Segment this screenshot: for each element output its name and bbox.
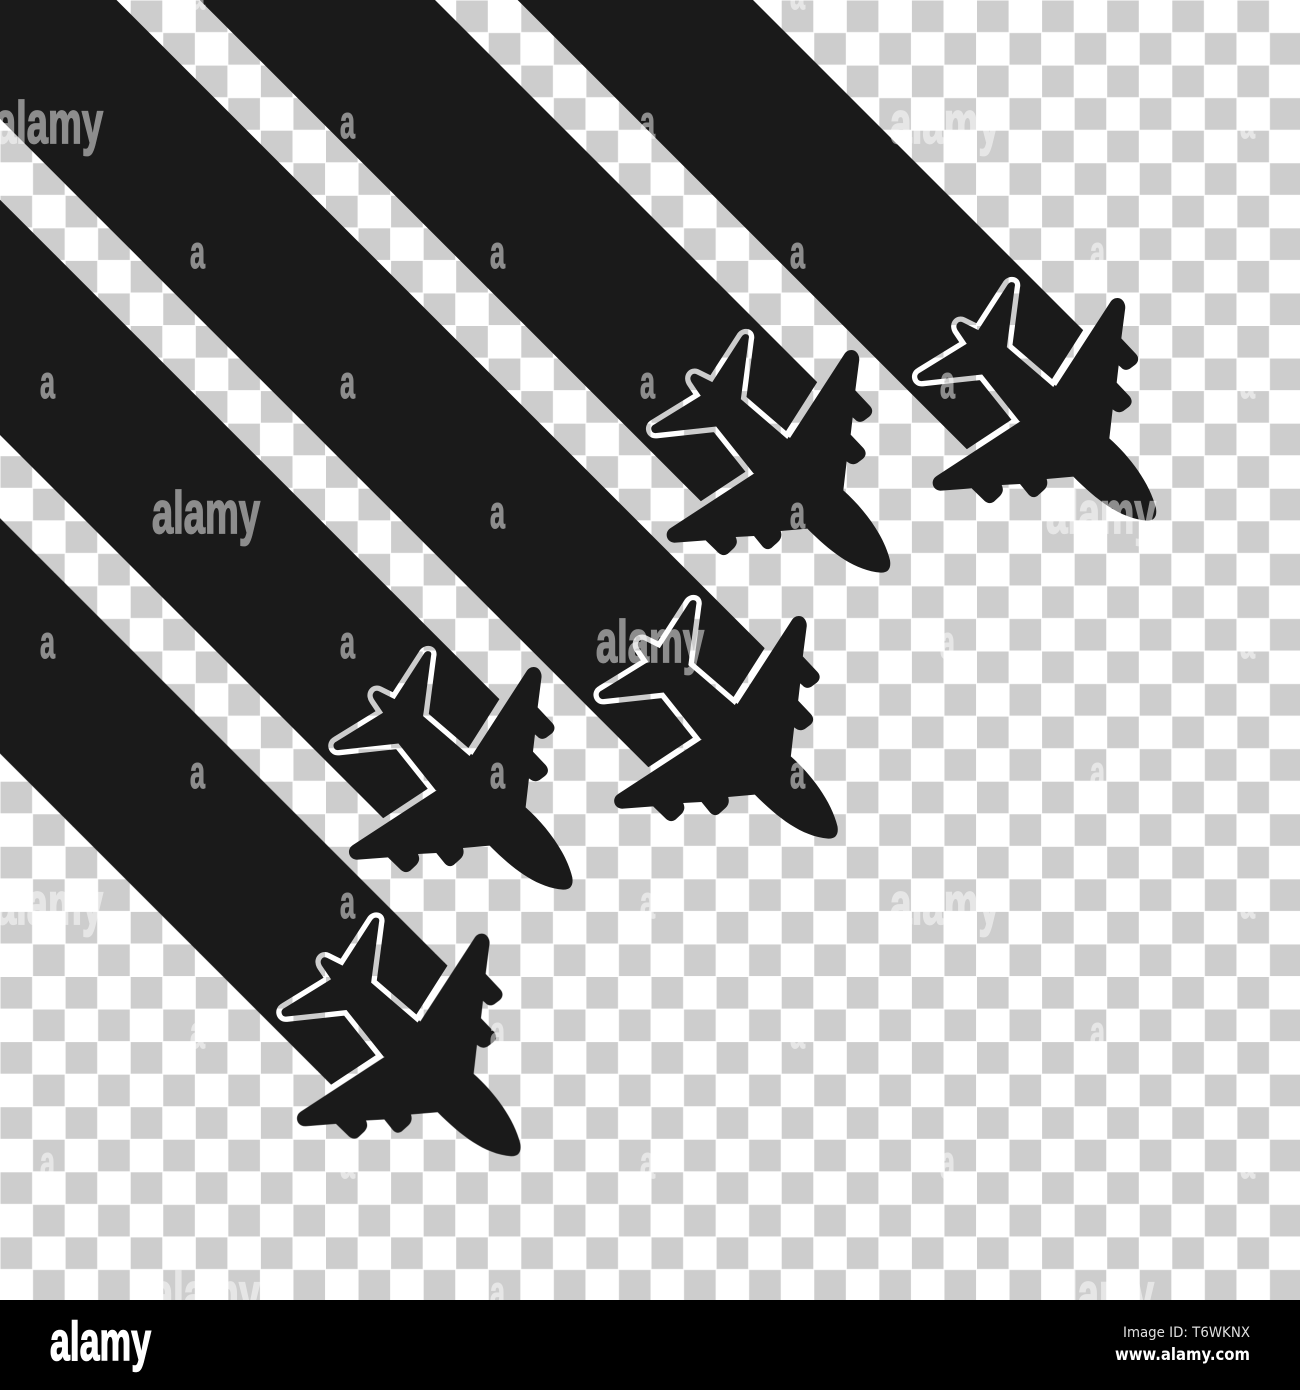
small watermark marks: a bbox=[1090, 1006, 1105, 1058]
small watermark marks: a bbox=[40, 616, 55, 668]
large watermark marks bbox=[0, 90, 1156, 1327]
small watermark marks: a bbox=[1240, 356, 1255, 408]
jet 2 with contrail bbox=[0, 0, 890, 573]
large watermark marks: alamy bbox=[1046, 1261, 1154, 1327]
jet 5 with contrail (bottom left) bbox=[0, 518, 521, 1156]
small watermark marks: a bbox=[340, 356, 355, 408]
small watermark marks: a bbox=[1240, 616, 1255, 668]
large watermark marks: alamy bbox=[596, 609, 704, 675]
jet 3 with contrail (centre) bbox=[0, 0, 838, 839]
small watermark marks: a bbox=[1240, 876, 1255, 928]
small watermark marks: a bbox=[490, 486, 505, 538]
small watermark marks: a bbox=[790, 486, 805, 538]
small watermark marks: a bbox=[340, 616, 355, 668]
small watermark marks: a bbox=[340, 96, 355, 148]
small watermark marks: a bbox=[1240, 96, 1255, 148]
image id: Image ID: T6WKNX bbox=[1123, 1325, 1250, 1341]
small watermark marks: a bbox=[790, 746, 805, 798]
small watermark marks: a bbox=[190, 746, 205, 798]
small watermark marks: a bbox=[490, 746, 505, 798]
large watermark marks: alamy bbox=[1046, 480, 1156, 546]
small watermark marks: a bbox=[490, 226, 505, 278]
small watermark marks: a bbox=[340, 876, 355, 928]
small watermark marks: a bbox=[640, 876, 655, 928]
small watermark marks: a bbox=[940, 616, 955, 668]
small watermark marks: a bbox=[40, 1136, 55, 1188]
small watermark marks: a bbox=[790, 1006, 805, 1058]
small watermark marks: a bbox=[790, 226, 805, 278]
footer bar bbox=[0, 1300, 1300, 1390]
small watermark marks: a bbox=[1090, 746, 1105, 798]
small watermark marks: a bbox=[340, 1136, 355, 1188]
jet 1 with contrail (top right) bbox=[0, 0, 1156, 521]
small watermark marks: a bbox=[940, 356, 955, 408]
small watermark marks: a bbox=[40, 356, 55, 408]
large watermark marks: alamy bbox=[0, 871, 103, 937]
large watermark marks: alamy bbox=[890, 90, 1000, 156]
small watermark marks: a bbox=[190, 1006, 205, 1058]
small watermark marks: a bbox=[640, 1136, 655, 1188]
large watermark marks: alamy bbox=[0, 90, 103, 156]
small watermark marks: a bbox=[490, 1006, 505, 1058]
jet formation with contrails bbox=[0, 0, 1156, 1156]
website: www.alamy.com bbox=[1115, 1345, 1250, 1365]
small watermark marks: a bbox=[1240, 1136, 1255, 1188]
small watermark marks: a bbox=[490, 1266, 505, 1318]
large watermark marks: alamy bbox=[152, 1261, 260, 1327]
small watermark marks: a bbox=[190, 226, 205, 278]
footer logo: alamy bbox=[50, 1310, 151, 1372]
small watermark marks: a bbox=[940, 1136, 955, 1188]
large watermark marks: alamy bbox=[890, 871, 1000, 937]
small watermark marks: a bbox=[640, 356, 655, 408]
small watermark marks: a bbox=[1090, 226, 1105, 278]
small watermark marks: a bbox=[640, 96, 655, 148]
large watermark marks: alamy bbox=[152, 480, 260, 546]
jet 4 with contrail bbox=[0, 0, 573, 890]
